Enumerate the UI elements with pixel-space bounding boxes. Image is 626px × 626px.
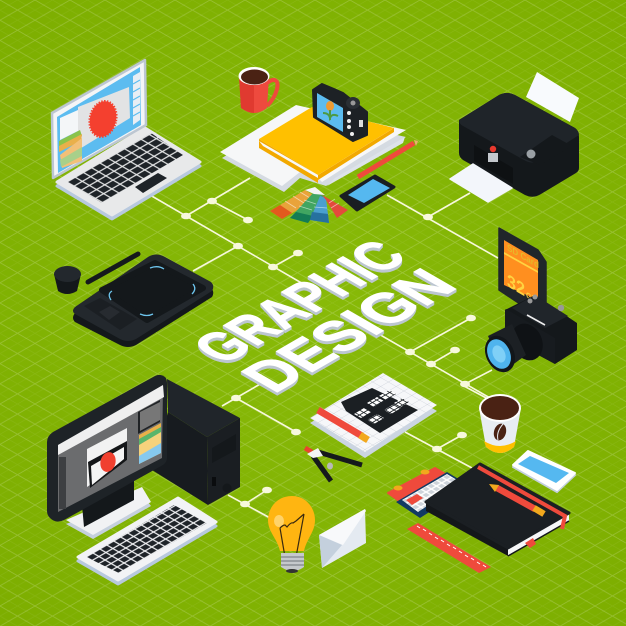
title: GRAPHIC DESIGN: GRAPHIC [179, 232, 421, 372]
printer body [459, 93, 579, 197]
side panel [138, 400, 160, 434]
connector nodes [181, 198, 476, 507]
connector network [150, 178, 498, 519]
laptop red burst [86, 98, 120, 140]
laptop lid [52, 60, 146, 178]
icon: ruler [407, 523, 491, 573]
laptop tool column [133, 72, 140, 125]
icon: computer tower [152, 379, 240, 505]
laptop base [57, 132, 200, 219]
icon: calendar organizer [388, 468, 470, 518]
pencil on notebook [497, 488, 535, 509]
icon: book stack with camera [220, 84, 406, 192]
icon: paper coffee cup [479, 394, 521, 453]
output tray [450, 164, 512, 202]
icon: SD card [499, 228, 546, 305]
icon: monitor [47, 375, 167, 539]
tablet body [73, 258, 213, 347]
icon: color swatch fan [270, 187, 348, 223]
icon: SD card: 32 [507, 269, 525, 300]
notebook cover top [426, 464, 569, 548]
small camera [313, 84, 367, 141]
connector: heading to computer [222, 383, 296, 432]
pencil on sketchbook [318, 410, 362, 436]
laptop keyboard [67, 133, 183, 203]
connector: sketchbook to notebook [405, 385, 490, 468]
icon: notebook with pencil [426, 464, 569, 556]
icon: keyboard [78, 498, 216, 584]
notebook cover side [426, 502, 508, 556]
small cup [54, 274, 81, 294]
tablet blue corner arcs [109, 267, 195, 316]
connector: computer to bulb [228, 490, 272, 519]
building drawing [341, 388, 418, 433]
title: GRAPHIC DESIGN: DESIGN [228, 261, 471, 401]
icon: SD card: GB [526, 290, 537, 305]
icon: smartphone [341, 176, 394, 210]
icon: printer [450, 72, 579, 202]
icon: DSLR camera [479, 294, 577, 377]
icon: red mug [238, 67, 278, 113]
icon: light bulb [268, 496, 315, 573]
icon: envelope [319, 509, 366, 568]
icon: red pencil [358, 140, 418, 177]
icon: drawing compass [305, 448, 362, 481]
artwork window [87, 428, 127, 487]
connector: heading to right camera and cup [377, 318, 492, 398]
paper sheets [222, 112, 406, 192]
icon: white smartphone [513, 451, 575, 492]
title: GRAPHIC DESIGN [179, 232, 471, 401]
icon: sketchbook with building plan [310, 373, 437, 458]
connector: laptop to heading [150, 178, 305, 285]
notebook pages edge [508, 513, 569, 556]
elastic strap [478, 467, 565, 529]
yellow book [259, 107, 394, 175]
icon: SD card: SD Card [507, 242, 539, 270]
icon: laptop [52, 60, 200, 219]
connector: phone and printer to SD card [387, 193, 498, 258]
monitor frame [47, 375, 167, 522]
paper in [526, 72, 579, 122]
stylus [88, 254, 138, 282]
monitor base and stand [66, 494, 151, 539]
laptop palette [59, 130, 82, 148]
icon: drawing tablet with pen and cup [54, 254, 213, 347]
